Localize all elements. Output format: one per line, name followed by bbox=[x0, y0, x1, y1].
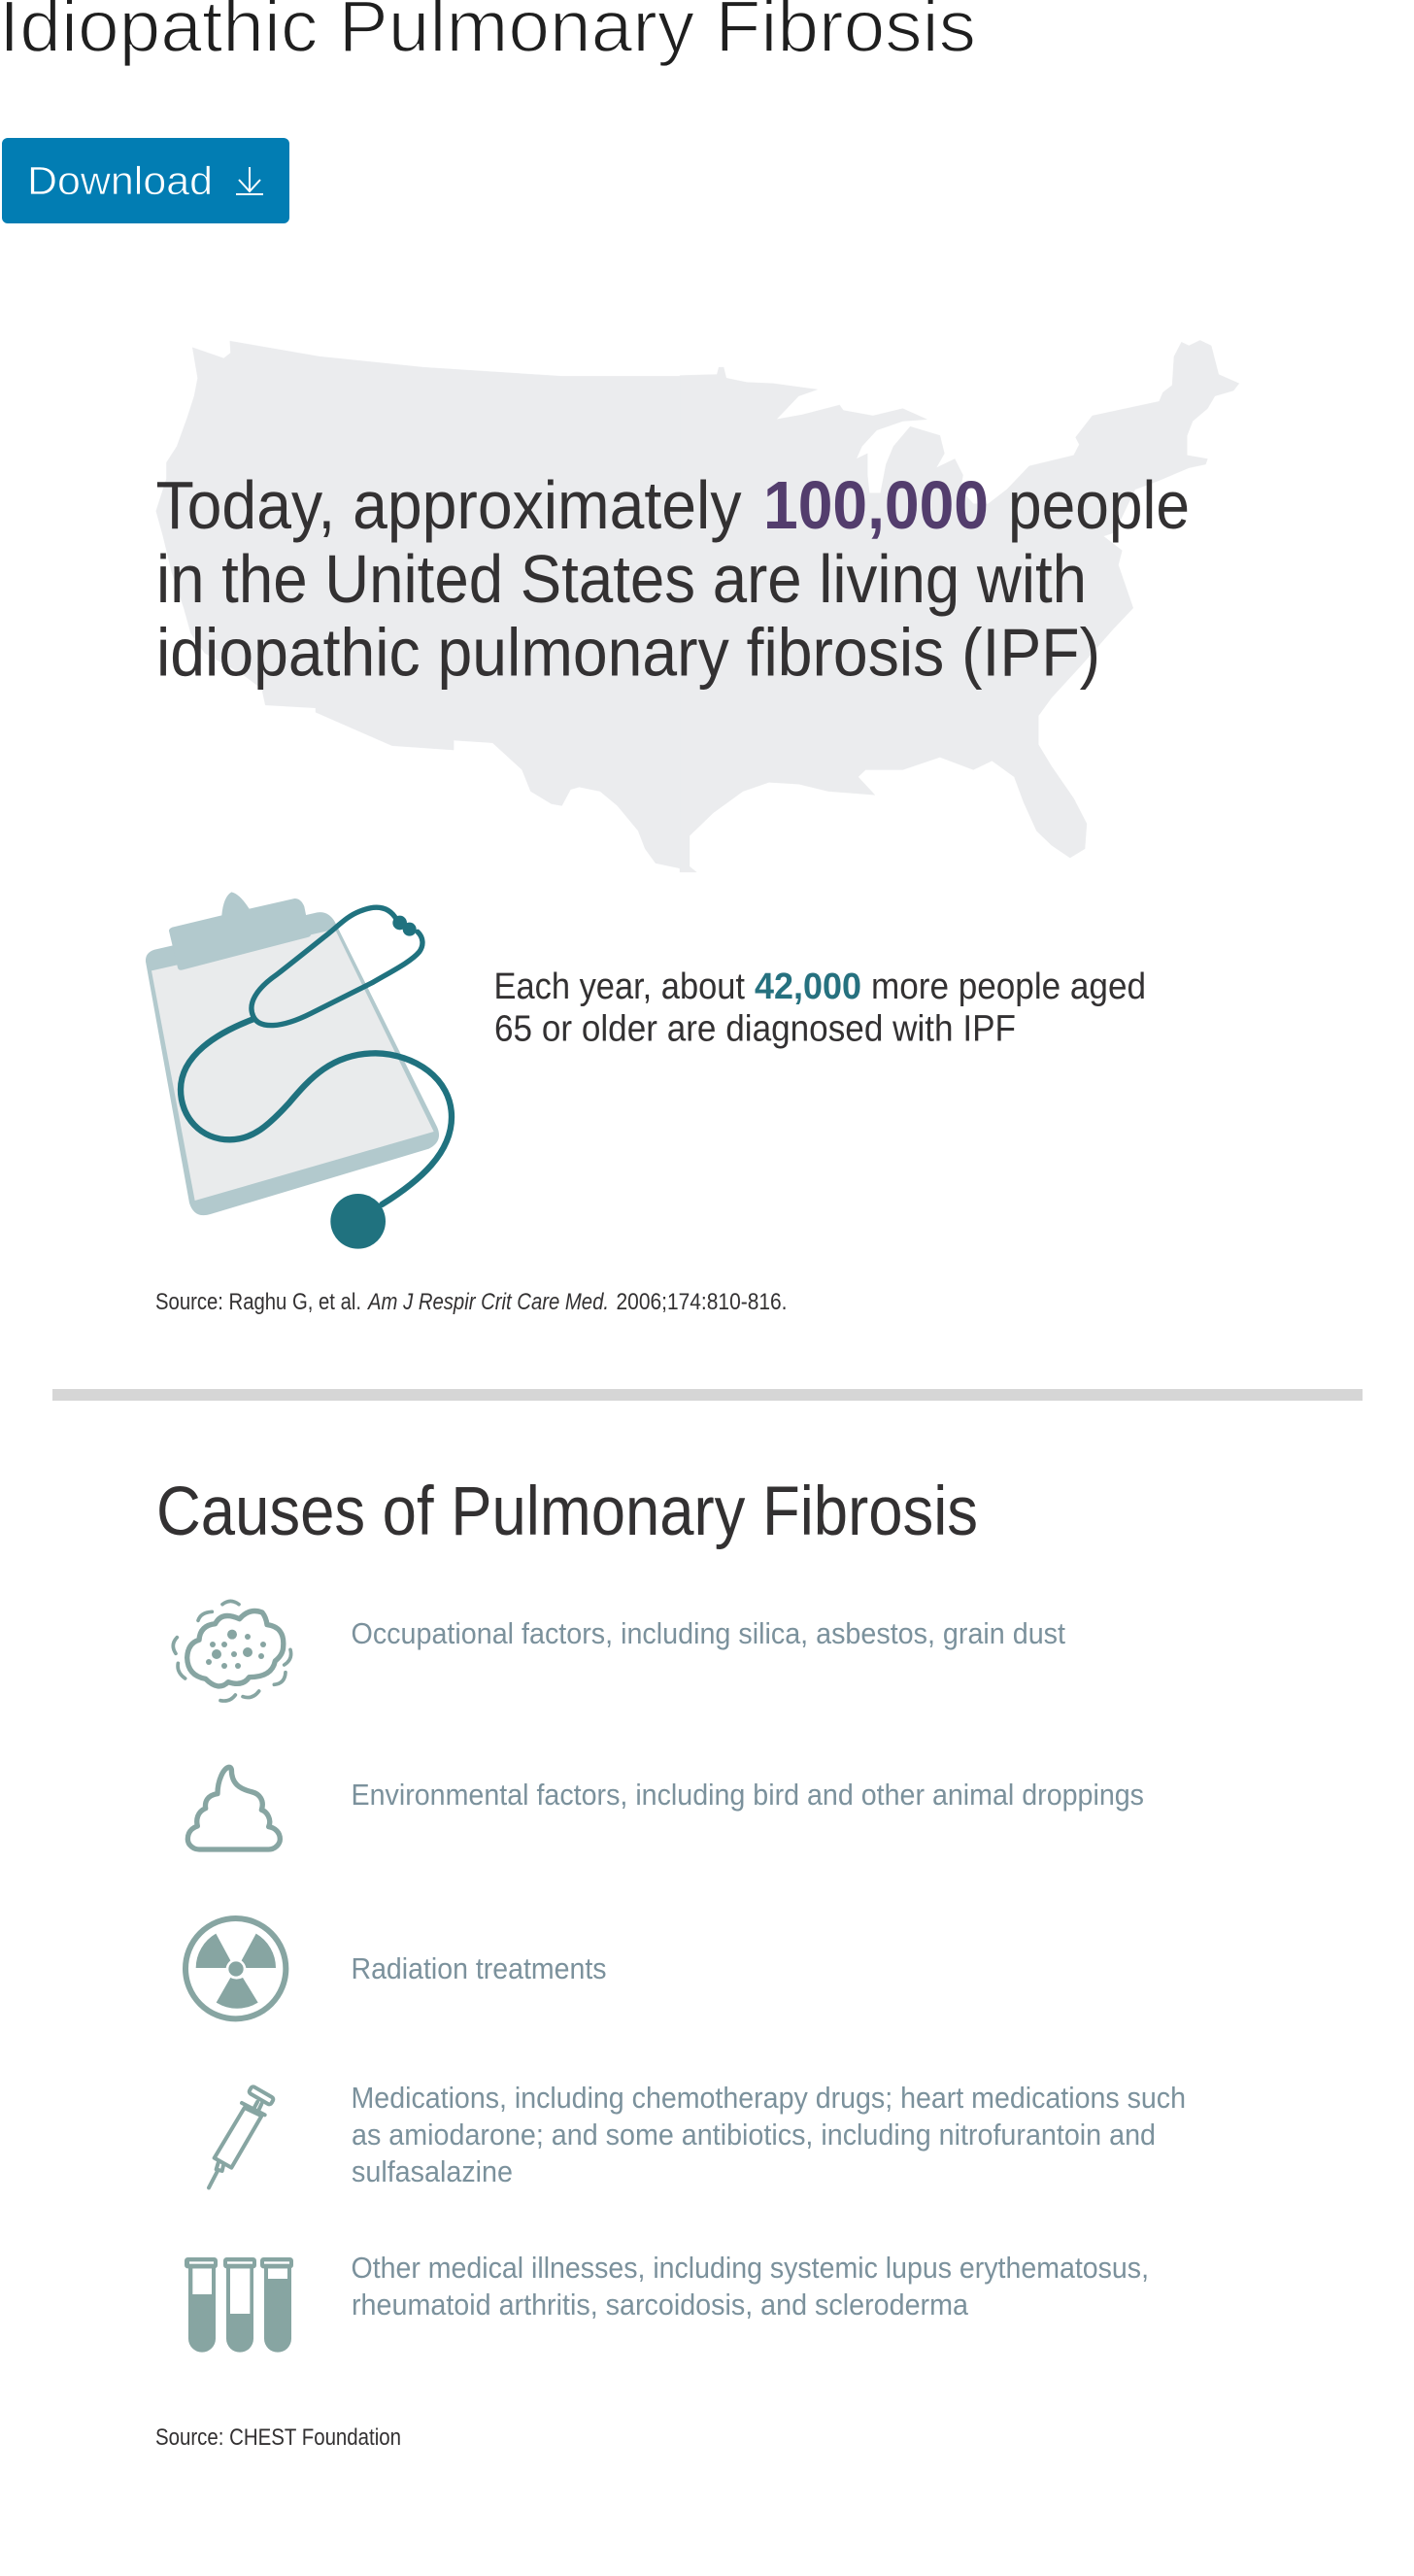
text: medications: as amiodarone; and some antibiotics, including nitrofurantoin and bbox=[352, 2118, 1156, 2152]
heading: causes: Causes of Pulmonary Fibrosis bbox=[156, 1474, 978, 1550]
icon: radiation symbol bbox=[185, 1918, 286, 2018]
download button: Download bbox=[27, 158, 213, 203]
source: CHEST Foundation: Source: CHEST Foundation bbox=[155, 2424, 401, 2451]
text: 42,000 diagnosed each year: Each year, about bbox=[493, 966, 745, 1007]
headline: 100,000 people: 100,000 bbox=[763, 467, 989, 543]
text: other medical illnesses bbox=[352, 2251, 1149, 2322]
text: 42,000 diagnosed each year bbox=[493, 966, 1146, 1049]
source: Raghu bbox=[155, 1289, 787, 1315]
icon: syringe bbox=[209, 2085, 274, 2187]
source: Raghu: Am J Respir Crit Care Med. bbox=[366, 1289, 609, 1315]
source: Raghu: 2006;174:810-816. bbox=[616, 1289, 787, 1315]
source: Raghu: Source: Raghu G, et al. bbox=[155, 1289, 361, 1315]
headline: 100,000 people: idiopathic pulmonary fibrosis (IPF) bbox=[156, 614, 1100, 690]
text: 42,000 diagnosed each year: more people aged bbox=[871, 966, 1146, 1007]
text: environmental factors: Environmental factors, including bird and other animal droppings bbox=[352, 1778, 1144, 1812]
text: occupational factors: Occupational factors, including silica, asbestos, grain dust bbox=[352, 1616, 1065, 1650]
headline: 100,000 people bbox=[155, 467, 1190, 690]
text: other medical illnesses: Other medical illnesses, including systemic lupus erythematosus, bbox=[352, 2251, 1149, 2285]
text: medications: sulfasalazine bbox=[352, 2154, 513, 2188]
icon: dust cloud bbox=[173, 1601, 291, 1701]
text: other medical illnesses: rheumatoid arthritis, sarcoidosis, and scleroderma bbox=[352, 2288, 969, 2322]
icon: clipboard with stethoscope bbox=[146, 892, 452, 1249]
headline: 100,000 people: Today, approximately bbox=[155, 467, 742, 543]
headline: 100,000 people: people bbox=[1008, 467, 1190, 543]
text: 42,000 diagnosed each year: 65 or older are diagnosed with IPF bbox=[494, 1008, 1016, 1049]
text: medications: Medications, including chemotherapy drugs; heart medications such bbox=[352, 2081, 1186, 2115]
download button bbox=[2, 138, 289, 223]
icon: droppings bbox=[187, 1767, 280, 1849]
headline: 100,000 people: in the United States are living with bbox=[156, 541, 1087, 617]
text: medications bbox=[352, 2081, 1186, 2188]
icon: test tubes bbox=[185, 2257, 293, 2353]
text: radiation treatments: Radiation treatments bbox=[352, 1951, 606, 1985]
map of the United States bbox=[156, 340, 1239, 872]
text: 42,000 diagnosed each year: 42,000 bbox=[755, 966, 861, 1007]
